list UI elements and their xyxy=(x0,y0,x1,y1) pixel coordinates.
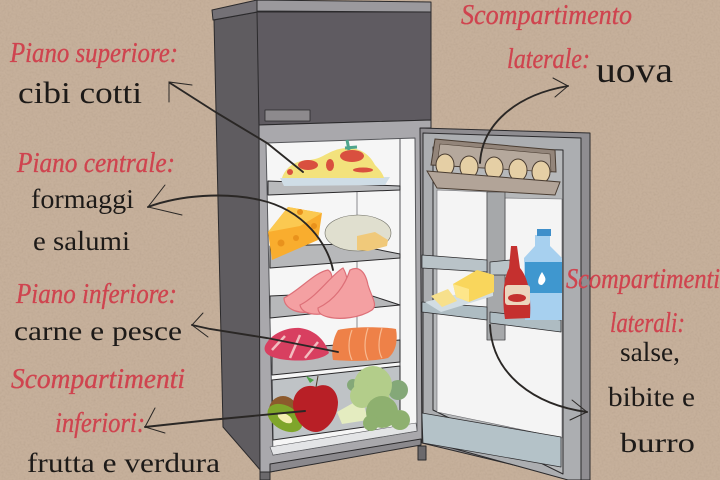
label: top shelf xyxy=(9,37,178,110)
arrow: lower shelf xyxy=(192,313,338,352)
lid inner xyxy=(437,144,551,172)
label: side compartments xyxy=(566,263,720,458)
label: middle shelf: formaggi xyxy=(31,184,134,214)
food: broccoli xyxy=(337,366,410,431)
label: side compartment: uova xyxy=(596,50,673,90)
arrow: bottom drawer xyxy=(145,408,305,433)
food: red meat xyxy=(265,328,329,361)
label: side compartment xyxy=(461,0,673,90)
door white panels xyxy=(437,190,562,438)
carton tray xyxy=(427,171,560,195)
door outer xyxy=(420,128,590,480)
door shelf: mid left xyxy=(422,302,487,320)
label: side compartments: bibite e xyxy=(608,382,695,412)
door shelf: upper right xyxy=(490,260,510,275)
label: side compartments: burro xyxy=(620,428,695,458)
label: lower compartments xyxy=(11,363,220,478)
freezer door xyxy=(257,12,431,125)
arrow: top shelf xyxy=(169,82,303,172)
food: sliced ham xyxy=(284,268,375,318)
food: butter dish xyxy=(425,270,494,312)
label: lower shelf: carne e pesce xyxy=(14,316,182,346)
label: lower shelf: Piano inferiore: xyxy=(15,278,177,310)
fridge xyxy=(212,0,590,480)
door shelf: mid right xyxy=(490,312,561,332)
food: kiwi xyxy=(263,396,307,438)
shelf 1 xyxy=(268,181,400,195)
fridge interior xyxy=(266,138,417,455)
label: middle shelf: e salumi xyxy=(33,226,130,256)
label: lower compartments: frutta e verdura xyxy=(27,448,220,478)
food: round cheese xyxy=(325,215,391,251)
shelf 2 xyxy=(270,244,400,268)
fridge bottom strip xyxy=(270,439,421,472)
label: top shelf: cibi cotti xyxy=(18,75,142,110)
shelf 4 xyxy=(272,340,400,375)
sauce xyxy=(287,150,373,175)
centre rib xyxy=(356,186,358,330)
door bottom bin xyxy=(422,413,561,467)
interior side rail xyxy=(399,139,401,425)
arrows xyxy=(145,78,587,433)
food: spaghetti plate xyxy=(280,140,390,186)
arrow: eggs xyxy=(480,78,568,163)
label: top shelf: Piano superiore: xyxy=(9,37,178,69)
fridge top lid xyxy=(212,0,431,20)
interior lower lip xyxy=(270,423,417,455)
fridge side panel xyxy=(214,12,262,472)
food: egg carton xyxy=(427,139,560,195)
food: water bottle xyxy=(524,229,562,320)
shelf 3 xyxy=(270,292,400,318)
door inner frame xyxy=(423,133,581,480)
arrow: door shelves xyxy=(490,325,587,420)
food: apple xyxy=(293,376,338,432)
label: lower compartments: Scompartimenti xyxy=(11,363,185,395)
label: side compartment: laterale: xyxy=(507,43,590,75)
label: side compartments: laterali: xyxy=(610,307,685,339)
label: lower compartments: inferiori: xyxy=(55,407,145,439)
basil xyxy=(345,140,357,150)
label: side compartments: salse, xyxy=(620,337,680,367)
pasta xyxy=(282,148,384,178)
arrow: middle shelf xyxy=(148,185,333,270)
plate xyxy=(280,177,390,186)
food: cheese wedge xyxy=(268,207,322,260)
label: middle shelf xyxy=(16,147,175,256)
food: ketchup bottle xyxy=(503,246,530,319)
door inner panel xyxy=(433,147,563,474)
eggs xyxy=(436,154,550,183)
label: middle shelf: Piano centrale: xyxy=(16,147,175,179)
label: lower shelf xyxy=(14,278,182,346)
door shelf: upper left xyxy=(422,255,487,272)
food: salmon xyxy=(332,327,397,361)
fridge body frame xyxy=(259,120,431,472)
fridge feet xyxy=(260,446,426,480)
vegetable drawer xyxy=(272,366,400,440)
carton lid xyxy=(431,139,556,172)
